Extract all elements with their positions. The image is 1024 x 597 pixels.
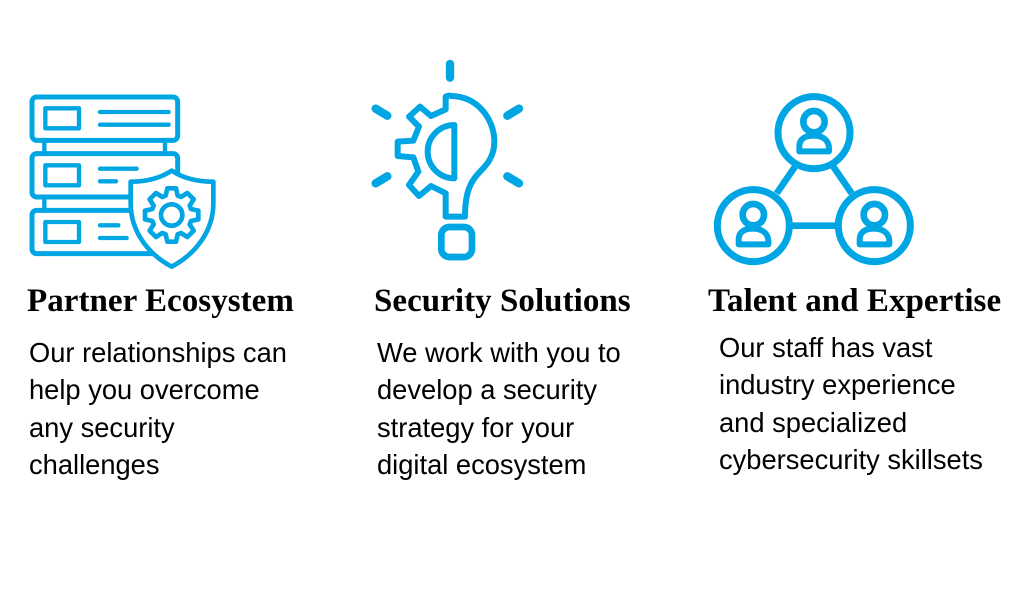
text: Talent and Expertise description: industry experience <box>719 369 956 400</box>
heading: Partner Ecosystem: Partner Ecosystem <box>27 283 294 319</box>
text: Talent and Expertise description: Our staff has vast <box>719 332 932 363</box>
text: Talent and Expertise description: cybersecurity skillsets <box>719 444 983 475</box>
text: Talent and Expertise description <box>719 332 983 475</box>
icon: light bulb with gear <box>372 60 524 260</box>
text: Partner Ecosystem description: challenges <box>29 449 160 480</box>
text: Talent and Expertise description: and specialized <box>719 407 907 438</box>
text: Security Solutions description <box>377 337 621 480</box>
text: Security Solutions description: digital ecosystem <box>377 449 586 480</box>
text: Security Solutions description: develop a security <box>377 374 597 405</box>
text: Partner Ecosystem description: Our relationships can <box>29 337 287 368</box>
heading: Talent and Expertise: Talent and Expertise <box>708 283 1001 319</box>
icon: server stack with shield and gear <box>30 94 216 269</box>
icon: three connected people <box>714 93 914 266</box>
text: Partner Ecosystem description <box>29 337 287 480</box>
text: Security Solutions description: strategy for your <box>377 412 574 443</box>
text: Partner Ecosystem description: any security <box>29 412 175 443</box>
heading: Security Solutions: Security Solutions <box>374 283 631 319</box>
text: Security Solutions description: We work with you to <box>377 337 621 368</box>
text: Partner Ecosystem description: help you overcome <box>29 374 260 405</box>
